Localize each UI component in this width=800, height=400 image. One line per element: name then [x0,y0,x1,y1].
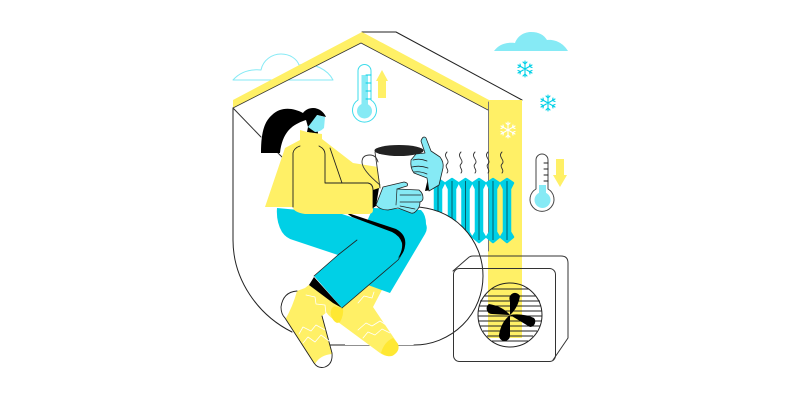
roof outer outline [362,32,522,100]
round seat outline [405,207,483,345]
hair [261,108,326,153]
arrow: down [553,159,567,187]
heat waves above radiator [445,152,503,173]
radiator [432,179,513,242]
white round seat [345,207,483,345]
house wall and floor outline [233,108,414,345]
column left edge [488,102,490,251]
snowflake: cyan upper [518,61,532,77]
back sock [326,280,399,356]
snowflake: white on column [501,122,515,138]
cloud outline: left [233,54,333,80]
thermometer: cold outdoor [530,154,554,211]
front trouser leg [277,208,403,308]
mug [362,145,436,208]
fan grille [478,283,542,347]
sweater [265,130,381,214]
outdoor heat pump unit [453,256,568,362]
attic corner line [233,108,283,158]
lower hand [376,182,423,213]
face [308,115,325,132]
sweater seam lines [293,146,373,208]
back trouser leg [345,208,427,293]
cloud filled: right [494,32,568,51]
roof yellow band [233,32,489,110]
arrow: up [376,70,388,98]
fan blades [487,293,535,341]
black ankle shadow [309,277,342,308]
thermometer: warm indoor [352,65,376,122]
upper hand [411,137,443,191]
wall yellow column [488,100,522,338]
roof lower edge [233,43,488,110]
front sock [281,284,338,368]
black trouser crease [345,212,405,258]
snowflake: cyan lower [541,95,555,111]
